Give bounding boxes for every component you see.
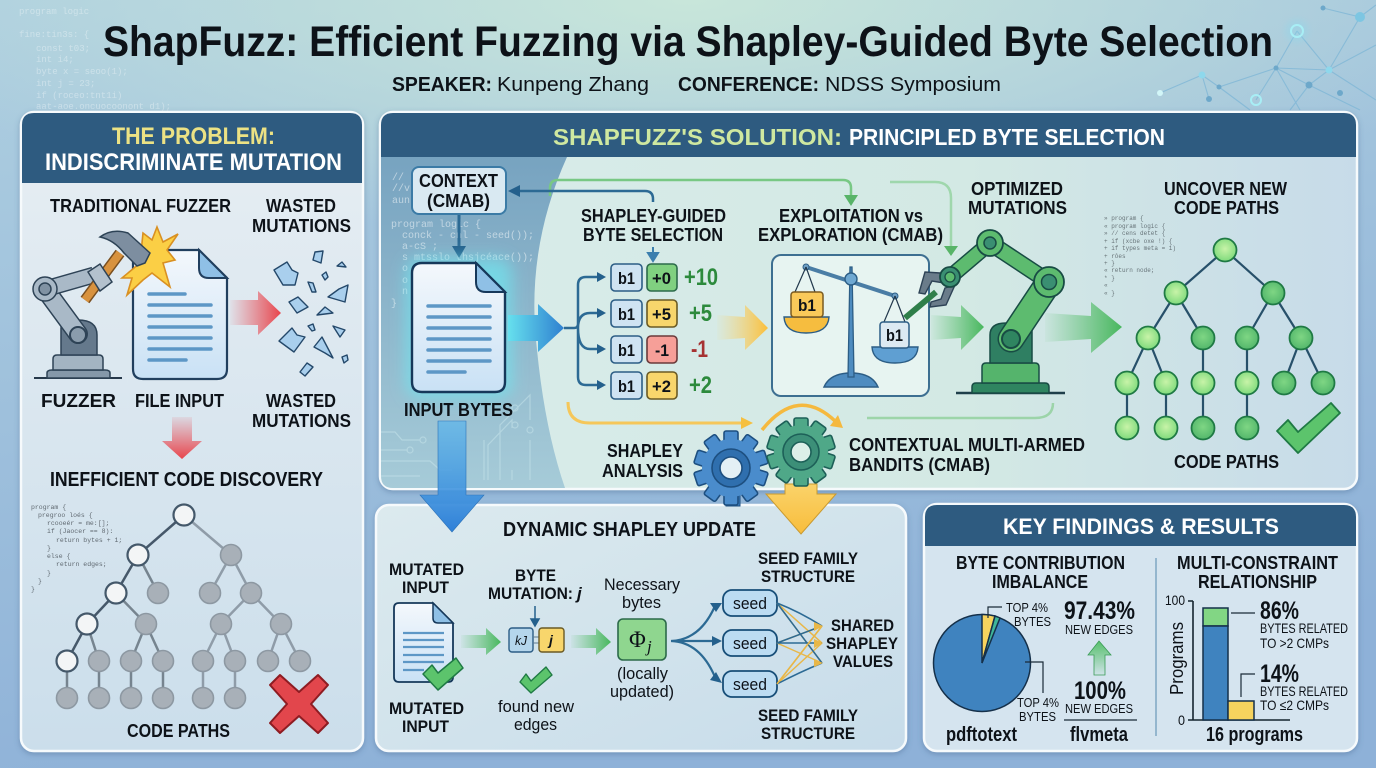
arrows: seeds to shared values: [777, 603, 823, 684]
pie labels: TOP 4%: [1017, 695, 1059, 710]
stat: 86 percent: TO >2 CMPs: [1260, 635, 1329, 651]
speaker and conference line: SPEAKER:: [392, 74, 492, 96]
heading: contextual multi-armed bandits: BANDITS (CMAB): [849, 455, 990, 475]
speaker and conference line: CONFERENCE:: [678, 74, 819, 96]
background code snippet: program logic: [19, 7, 89, 17]
stat: 97.43 percent: 97.43%: [1064, 597, 1135, 625]
icon: blue gear: [694, 431, 768, 505]
heading: multi-constraint relationship: MULTI-CONSTRAINT: [1177, 553, 1338, 573]
label: shapley analysis: ANALYSIS: [602, 461, 683, 481]
icon: balance scale: b1: [886, 326, 903, 345]
pie labels: BYTES: [1014, 614, 1051, 629]
arrow: down to inefficient discovery: [162, 417, 202, 459]
code text in backdrop: s mtsslo thsjcéace());: [402, 252, 534, 264]
label: locally updated: (locally: [617, 664, 668, 683]
circuit traces: [381, 395, 533, 480]
arrow: faint green return: [867, 403, 1053, 418]
heading: byte contribution imbalance: BYTE CONTRIBUTION: [956, 553, 1125, 573]
icon: green gear: [767, 418, 835, 486]
heading: exploitation vs exploration: EXPLORATION (CMAB): [758, 225, 943, 245]
stat: 100 percent: 100%: [1074, 677, 1126, 705]
code snippet: left tree: }: [38, 578, 42, 585]
code text in backdrop: conck - cnl - seed());: [402, 230, 534, 242]
icon: shattered fragments: [274, 251, 348, 376]
byte row +2: +2: [652, 377, 671, 396]
arrow: file to wasted mutations: [230, 291, 281, 335]
panel: the problem: [21, 112, 363, 751]
arrow: input bytes to selection: [508, 304, 564, 352]
byte boxes kj and j: [509, 628, 564, 652]
label: seed family structure bottom: SEED FAMILY: [758, 706, 859, 725]
panel header: key findings: KEY FINDINGS & RESULTS: [1003, 514, 1279, 539]
stat: 86 percent: 86%: [1260, 597, 1299, 625]
heading: multi-constraint relationship: RELATIONSHIP: [1198, 572, 1317, 592]
code snippet: right tree: + if (xcbe oxe !) {: [1104, 238, 1173, 245]
label: mutated input bottom: MUTATED: [389, 699, 464, 718]
icon: impact burst: [122, 227, 178, 295]
icon: robot arm with hammer: [33, 231, 150, 378]
background network graphic: [1157, 5, 1376, 110]
label: mutated input bottom: INPUT: [402, 717, 450, 736]
arrow: shapley to context: [508, 185, 653, 202]
icon: green robot arm: [905, 230, 1065, 393]
seed boxes: seed: [733, 634, 767, 653]
byte row +0: [611, 264, 718, 291]
arrow: selection to bytes: [648, 247, 658, 261]
heading: optimized mutations: MUTATIONS: [968, 198, 1067, 218]
byte row +0: b1: [618, 269, 635, 288]
stacked bar chart: 0: [1178, 712, 1185, 728]
code snippet: left tree: }: [47, 570, 51, 577]
byte row +5: +5: [689, 300, 712, 327]
icon: check on document: [423, 658, 463, 690]
code snippet: right tree: [1104, 215, 1176, 297]
icon: file input document: [133, 250, 227, 379]
heading: optimized mutations: [968, 179, 1067, 218]
label: found new edges: [498, 697, 575, 734]
label: pdftotext: pdftotext: [946, 724, 1017, 746]
stat: 86 percent: [1260, 597, 1348, 651]
heading: contextual multi-armed bandits: CONTEXTUAL MULTI-ARMED: [849, 435, 1085, 455]
label: seed family structure top: STRUCTURE: [761, 567, 855, 586]
code snippet: right tree: + if types meta = 1): [1104, 245, 1176, 252]
label: 16 programs: 16 programs: [1206, 724, 1303, 746]
stat: 97.43 percent: [1064, 597, 1135, 637]
arrow: scale to robot: [931, 305, 984, 350]
code text in backdrop: // -: [392, 172, 416, 184]
tree: inefficient code paths: [56, 504, 310, 708]
icon: green check: [1277, 403, 1340, 453]
code snippet: right tree: + rôes: [1104, 253, 1126, 260]
label: locally updated: [610, 664, 674, 701]
panel header: the problem: THE PROBLEM:: [112, 123, 275, 150]
label: seed family structure top: [758, 549, 859, 586]
heading: dynamic shapley update: DYNAMIC SHAPLEY UPDATE: [503, 519, 756, 541]
speaker and conference line: NDSS Symposium: [825, 74, 1001, 96]
code snippet: right tree: * }: [1104, 275, 1115, 282]
box: phi j: Φ: [629, 627, 646, 652]
arrow: input bytes down to update: [420, 421, 484, 532]
label: mutated input bottom: [389, 699, 464, 736]
box: phi j: [618, 619, 666, 660]
label: wasted mutations bottom: WASTED: [266, 391, 336, 411]
box: context cmab: CONTEXT: [419, 171, 498, 191]
heading: shapley-guided byte selection: SHAPLEY-GUIDED: [581, 206, 726, 226]
code text in backdrop: }: [391, 298, 397, 310]
stat: 100 percent: NEW EDGES: [1065, 701, 1133, 716]
panel header: key findings: [925, 505, 1356, 546]
code snippet: right tree: + }: [1104, 260, 1115, 267]
label: seed family structure bottom: [758, 706, 859, 743]
code snippet: left tree: else {: [47, 553, 71, 560]
arrow: robot to code paths: [1045, 302, 1122, 353]
byte row +0: +0: [652, 269, 671, 288]
label: shared shapley values: [826, 616, 899, 671]
byte row +2: +2: [689, 372, 712, 399]
arrows: phi to seeds: [671, 603, 722, 683]
label: found new edges: found new: [498, 697, 575, 716]
icon: input bytes document: [406, 258, 512, 398]
code text in backdrop: //v: [392, 183, 410, 195]
arrowhead: faint green: [944, 246, 958, 256]
arrow: orange cycle arc: [762, 405, 843, 430]
label: code paths right: CODE PATHS: [1174, 452, 1279, 472]
panel header: the problem: [22, 113, 362, 183]
byte row +2: b1: [618, 377, 635, 396]
seed boxes: seed: [733, 675, 767, 694]
stacked bar chart: Programs: [1167, 622, 1187, 695]
label: code paths left: CODE PATHS: [127, 721, 230, 741]
code snippet: right tree: « }: [1104, 290, 1115, 297]
label: necessary bytes: Necessary: [604, 575, 680, 594]
heading: optimized mutations: OPTIMIZED: [971, 179, 1063, 199]
background code snippet: aat-aoe.oncuocoonont d1);: [36, 102, 171, 112]
label: seed family structure top: SEED FAMILY: [758, 549, 859, 568]
heading: shapley-guided byte selection: BYTE SELECTION: [583, 225, 723, 245]
heading: uncover new code paths: CODE PATHS: [1174, 198, 1279, 218]
background code snippet: fine:tin3s: {: [19, 30, 89, 40]
arrow: green feedback to exploitation: [550, 180, 851, 196]
panel: key findings: [924, 504, 1357, 751]
code snippet: right tree: « program logic {: [1104, 223, 1166, 230]
seed boxes: [723, 590, 777, 697]
pie labels: TOP 4%: [1006, 600, 1048, 615]
code snippet: left tree: [31, 504, 122, 593]
code text in backdrop: a-cS ;: [402, 242, 438, 253]
tree: new code paths: [1116, 238, 1334, 440]
pie labels: BYTES: [1019, 709, 1056, 724]
code snippet: right tree: « return node;: [1104, 267, 1154, 274]
code text in backdrop: o: [402, 264, 408, 275]
heading: multi-constraint relationship: [1177, 553, 1338, 592]
heading: contextual multi-armed bandits: [849, 435, 1085, 475]
panel header: solution: PRINCIPLED BYTE SELECTION: [849, 124, 1165, 150]
panel: shapfuzz solution: [380, 112, 1357, 489]
background code snippet: const t03;: [36, 44, 90, 54]
background code snippet: int i4;: [36, 55, 74, 65]
heading: byte contribution imbalance: [956, 553, 1125, 592]
byte row -1: -1: [691, 336, 708, 363]
icon: balance scale: b1: [798, 296, 816, 315]
byte row +5: [611, 300, 712, 327]
panel header: solution: SHAPFUZZ'S SOLUTION:: [553, 124, 842, 150]
label: fuzzer: FUZZER: [41, 391, 116, 411]
label: byte mutation j: BYTE: [515, 566, 556, 585]
label: found new edges: edges: [514, 715, 557, 734]
background code snippet: byte x = seoo(1);: [36, 67, 128, 77]
code snippet: left tree: return bytes + 1;: [56, 537, 122, 544]
heading: wasted mutations top: MUTATIONS: [252, 216, 351, 236]
box: context cmab: (CMAB): [427, 191, 490, 211]
heading: wasted mutations top: [252, 196, 351, 236]
byte row +0: +10: [684, 264, 718, 291]
box: phi j: j: [645, 637, 652, 656]
heading: shapley-guided byte selection: [581, 206, 726, 245]
arrow: down to byte: [531, 606, 539, 626]
byte row +5: +5: [652, 305, 671, 324]
byte row +2: [611, 372, 712, 399]
label: mutated input top: [389, 560, 464, 597]
dark code backdrop: [381, 157, 567, 488]
heading: exploitation vs exploration: [758, 206, 943, 245]
label: necessary bytes: bytes: [622, 593, 661, 612]
label: shared shapley values: VALUES: [833, 652, 893, 671]
code snippet: right tree: » program {: [1104, 215, 1144, 222]
heading: uncover new code paths: UNCOVER NEW: [1164, 179, 1287, 199]
stat: 100 percent: [1064, 677, 1137, 720]
arrow: up green: [1088, 641, 1111, 675]
code text in backdrop: n: [402, 287, 408, 298]
code text in backdrop: aun:: [392, 196, 416, 207]
code text in backdrop: program logic {: [391, 219, 481, 231]
arrow: input to byte mutation: [461, 628, 501, 655]
speaker and conference line: [392, 74, 1001, 96]
stat: 86 percent: BYTES RELATED: [1260, 620, 1348, 636]
code snippet: left tree: if (Jaocer == 8):: [47, 528, 113, 535]
stat: 14 percent: [1260, 660, 1348, 713]
label: shared shapley values: SHARED: [831, 616, 894, 635]
label: flvmeta: flvmeta: [1070, 724, 1129, 746]
panel header: solution: [381, 113, 1356, 157]
arrow: faint green feedback to optimized mutations: [890, 182, 951, 248]
code snippet: left tree: program {: [31, 504, 66, 511]
label: byte mutation j: MUTATION:: [488, 584, 573, 603]
arrow: yellow analysis curve: [568, 402, 753, 429]
byte boxes kj and j: j: [547, 632, 554, 648]
speaker and conference line: Kunpeng Zhang: [497, 74, 649, 96]
icon: red cross mark: [270, 675, 328, 733]
heading: uncover new code paths: [1164, 179, 1287, 218]
arrow: byte to phi: [571, 628, 611, 655]
icon: balance scale: [772, 255, 929, 396]
panel: dynamic shapley update: [376, 505, 906, 751]
label: file input: FILE INPUT: [135, 391, 224, 411]
label: shared shapley values: SHAPLEY: [826, 634, 899, 653]
background code snippet: if (roceo:tnt1i): [36, 91, 122, 101]
code snippet: left tree: pregroo loés {: [38, 512, 93, 519]
panel header: the problem: INDISCRIMINATE MUTATION: [45, 149, 342, 176]
heading: inefficient code discovery: INEFFICIENT CODE DISCOVERY: [50, 469, 324, 491]
stat: 14 percent: TO ≤2 CMPs: [1260, 697, 1329, 713]
label: mutated input top: INPUT: [402, 578, 450, 597]
byte row -1: b1: [618, 341, 635, 360]
heading: exploitation vs exploration: EXPLOITATION vs: [779, 206, 923, 226]
box: context cmab: [412, 167, 506, 214]
arrow: green gear down to update: [766, 484, 836, 534]
label: mutated input top: MUTATED: [389, 560, 464, 579]
arrow: context to input bytes: [452, 215, 466, 258]
code snippet: left tree: return edges;: [56, 561, 107, 568]
label: byte mutation j: [488, 566, 583, 603]
connector: blue gear stem: [726, 495, 740, 506]
label: shapley analysis: SHAPLEY: [607, 441, 683, 461]
code snippet: left tree: rcooeér = me:[];: [47, 520, 109, 527]
code snippet: left tree: }: [47, 545, 51, 552]
label: byte mutation j: j: [575, 584, 583, 603]
label: input bytes: INPUT BYTES: [404, 400, 513, 420]
code snippet: right tree: » // cens detet {: [1104, 230, 1166, 237]
stacked bar chart: 100: [1165, 592, 1185, 608]
code text in backdrop: [391, 172, 534, 310]
stacked bar chart: [1165, 592, 1290, 728]
code text in backdrop: o: [402, 276, 408, 287]
icon: small check: [520, 667, 552, 693]
pie chart: pdftotext: [934, 614, 1030, 712]
arrowhead: green feedback: [844, 195, 858, 206]
seed boxes: seed: [733, 594, 767, 613]
label: shapley analysis: [602, 441, 683, 481]
byte boxes kj and j: kJ: [515, 633, 527, 648]
label: wasted mutations bottom: MUTATIONS: [252, 411, 351, 431]
heading: byte contribution imbalance: IMBALANCE: [992, 572, 1088, 592]
stat: 14 percent: BYTES RELATED: [1260, 683, 1348, 699]
title: ShapFuzz: Efficient Fuzzing via Shapley-Guided Byte Selection: [103, 18, 1273, 66]
stat: 97.43 percent: NEW EDGES: [1065, 622, 1133, 637]
heading: wasted mutations top: WASTED: [266, 196, 336, 216]
code snippet: right tree: «: [1104, 282, 1108, 289]
icon: mutated document: [394, 603, 453, 682]
pie labels: [988, 600, 1059, 724]
label: seed family structure bottom: STRUCTURE: [761, 724, 855, 743]
arrow: selection to scale: [717, 305, 768, 350]
byte row -1: [611, 336, 708, 363]
background code snippet: int j = 23;: [36, 79, 95, 89]
code snippet: left tree: }: [31, 586, 35, 593]
branching arrows: [564, 272, 606, 390]
divider: [1155, 558, 1157, 736]
byte row +5: b1: [618, 305, 635, 324]
label: locally updated: updated): [610, 682, 674, 701]
heading: traditional fuzzer: TRADITIONAL FUZZER: [50, 196, 231, 216]
stat: 14 percent: 14%: [1260, 660, 1299, 688]
label: wasted mutations bottom: [252, 391, 351, 431]
label: necessary bytes: [604, 575, 680, 612]
background code snippet: [19, 7, 171, 112]
byte row -1: -1: [655, 341, 669, 360]
